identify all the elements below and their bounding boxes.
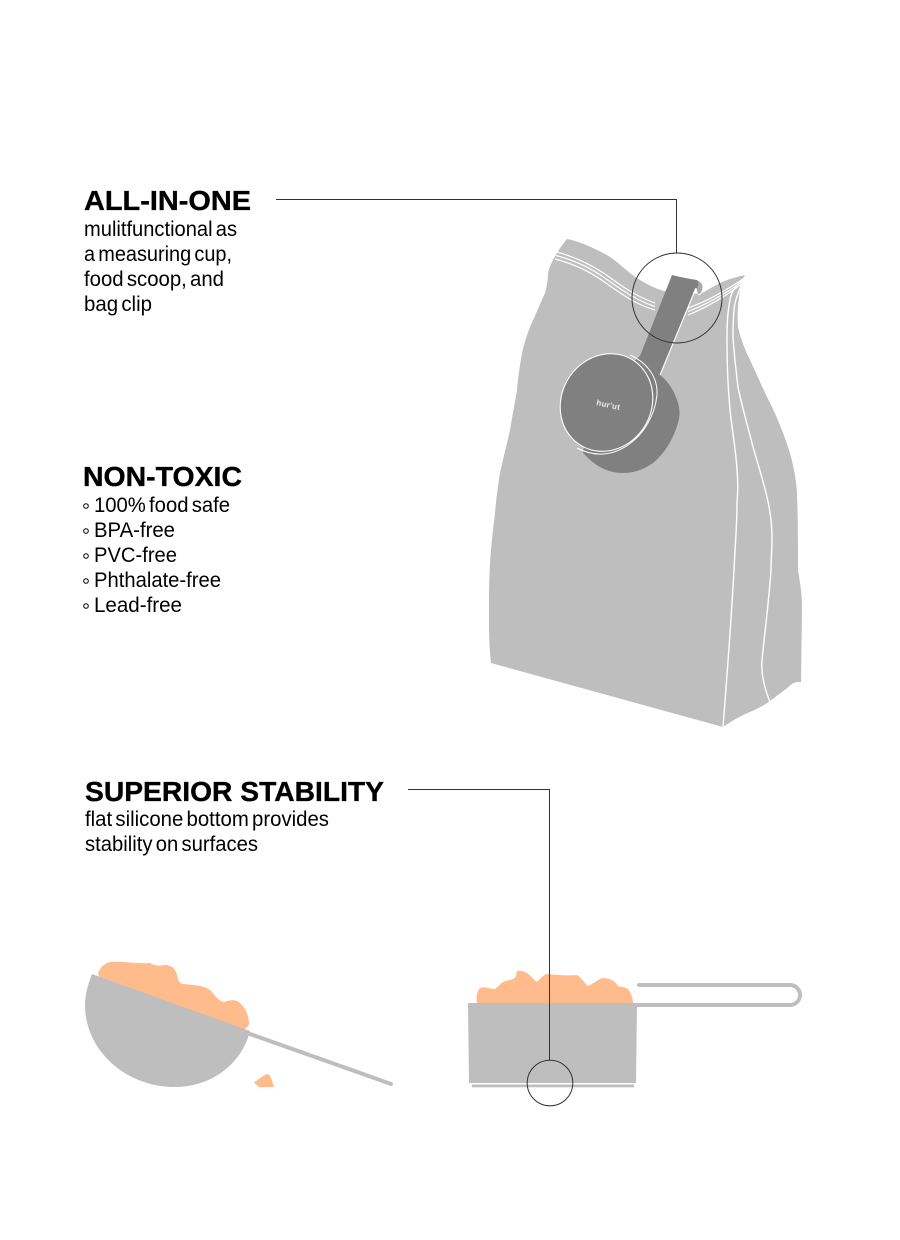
description: all-in-one: a measuring cup,	[84, 243, 232, 266]
food mound	[98, 962, 249, 1030]
illustration: scoop sitting flat	[468, 971, 800, 1087]
list: non-toxic: Phthalate-free	[94, 569, 221, 592]
scoop handle	[250, 1034, 391, 1084]
list: non-toxic: PVC-free	[94, 544, 177, 567]
description: all-in-one: mulitfunctional as	[84, 218, 237, 241]
callout line and circle: all-in-one	[276, 200, 722, 343]
description: superior stability: flat silicone bottom provides	[85, 808, 329, 831]
cup body	[468, 1003, 637, 1083]
description: all-in-one	[84, 218, 237, 316]
list: non-toxic: 100% food safe	[94, 494, 230, 517]
illustration: tilted scoop spilling food	[85, 962, 391, 1087]
cup rim	[577, 355, 657, 454]
list: non-toxic	[84, 494, 230, 617]
spilled food	[254, 1074, 274, 1087]
clip curl	[695, 280, 703, 295]
strap highlight	[660, 288, 696, 375]
list: non-toxic: Lead-free	[94, 594, 182, 617]
description: all-in-one: bag clip	[84, 293, 152, 316]
bag top seam stripes	[555, 252, 743, 315]
callout line and circle: superior stability	[408, 790, 573, 1106]
cup logo: hur'ut	[596, 398, 621, 412]
heading: superior stability: SUPERIOR STABILITY	[85, 776, 384, 807]
heading: non-toxic: NON-TOXIC	[83, 461, 242, 492]
description: all-in-one: food scoop, and	[84, 268, 224, 291]
food mound	[477, 971, 633, 1003]
clip strap	[640, 275, 698, 375]
illustration: food bag with clip	[489, 239, 802, 727]
measuring cup clip	[543, 275, 703, 473]
description: superior stability	[85, 808, 329, 856]
bag side seams	[723, 280, 772, 727]
bag body	[489, 239, 802, 727]
silicone base	[472, 1084, 634, 1087]
cup body	[583, 356, 680, 473]
cup handle	[637, 985, 800, 1005]
description: superior stability: stability on surfaces	[85, 833, 258, 856]
cup face	[543, 337, 670, 468]
scoop bowl	[85, 974, 250, 1087]
heading: all-in-one: ALL-IN-ONE	[84, 185, 251, 216]
list: non-toxic: BPA-free	[94, 519, 175, 542]
